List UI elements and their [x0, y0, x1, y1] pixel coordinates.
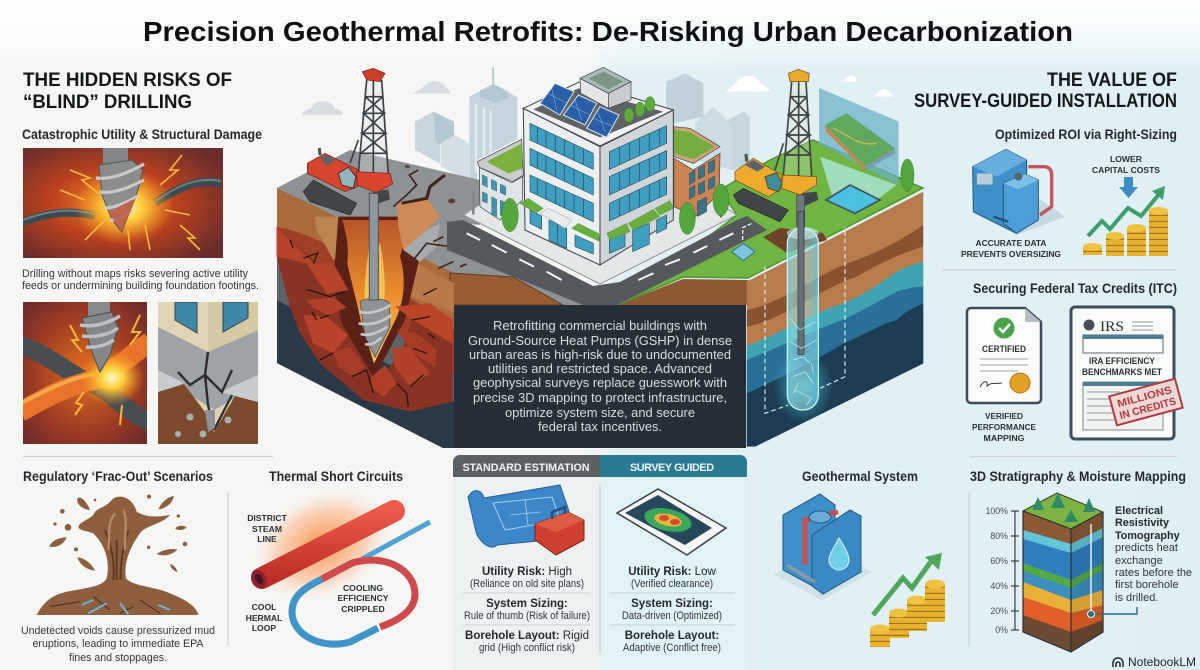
chart: stratigraphy block [1023, 493, 1137, 660]
callout: electrical resistivity tomography: first borehole [1115, 579, 1179, 591]
holographic survey screen and tablet [819, 88, 898, 213]
city block buildings [463, 67, 737, 284]
tree at right [901, 159, 914, 192]
solar panels [540, 83, 619, 137]
intro text panel: geophysical surveys replace guesswork with [473, 376, 727, 390]
roof shrubs [624, 97, 655, 122]
illustration: drill striking pipes [20, 302, 150, 444]
trees on block [1032, 493, 1095, 522]
icon: certified document: CERTIFIED [982, 344, 1026, 354]
header: survey guided: SURVEY GUIDED [630, 462, 714, 474]
heading: stratigraphy: 3D Stratigraphy & Moisture Mapping [970, 469, 1186, 484]
gray cracked surface [277, 150, 583, 305]
row text: standard estimation: Borehole Layout: Rigid [465, 630, 589, 642]
heading: geothermal system: Geothermal System [802, 469, 918, 484]
row text: standard estimation: System Sizing: [486, 598, 568, 610]
right brick building [674, 127, 720, 217]
chart axis: depth percentages [986, 506, 1019, 635]
green surveyed surface [617, 140, 923, 305]
icon: survey tablet [617, 489, 726, 555]
callout: electrical resistivity tomography: Tomography [1115, 530, 1180, 542]
label: cooling efficiency crippled: CRIPPLED [341, 604, 385, 614]
subheading: catastrophic damage: Catastrophic Utility & Structural Damage [22, 127, 262, 142]
caption: frac-out: Undetected voids cause pressurized mud [21, 625, 215, 637]
label: verified performance mapping: MAPPING [984, 433, 1025, 443]
intro text panel: federal tax incentives. [538, 420, 662, 434]
skyline and clouds [302, 67, 893, 187]
callout: electrical resistivity tomography: Resistivity [1115, 517, 1169, 529]
cracked rock and fire around blind drill [277, 217, 454, 412]
city plaza [463, 127, 737, 284]
header: standard estimation: STANDARD ESTIMATION [462, 462, 590, 474]
label: district steam line: DISTRICT [247, 513, 288, 523]
label: cool hermal loop: LOOP [252, 623, 276, 633]
icon: IRS form with stamp: IRA EFFICIENCY [1089, 356, 1155, 366]
heading: frac-out: Regulatory ‘Frac-Out’ Scenarios [23, 469, 213, 484]
panel: 3D stratigraphy [970, 469, 1192, 660]
chart axis: depth percentages: 0% [995, 625, 1008, 635]
heading: hidden risks: THE HIDDEN RISKS OF [23, 70, 232, 91]
label: lower capital costs: CAPITAL COSTS [1092, 165, 1160, 175]
lamp post [472, 191, 475, 215]
callout: electrical resistivity tomography: predicts heat [1115, 542, 1178, 554]
label: cooling efficiency crippled: COOLING [343, 583, 383, 593]
illustration: steam line and cooling loop [234, 467, 430, 644]
row text: standard estimation: Utility Risk: High [482, 566, 572, 578]
header: standard estimation [453, 455, 600, 477]
subheading: federal tax credits: Securing Federal Tax Credits (ITC) [973, 281, 1177, 296]
label: verified performance mapping: PERFORMANCE [972, 422, 1036, 432]
icon: IRS form with stamp: BENCHMARKS MET [1082, 367, 1162, 377]
label: accurate data: PREVENTS OVERSIZING [961, 249, 1061, 259]
icon: down arrow [1119, 177, 1138, 198]
intro text panel: precise 3D mapping to protect infrastructure, [473, 391, 727, 405]
intro text panel: Ground-Source Heat Pumps (GSHP) in dense [468, 334, 732, 348]
panel: comparison table [453, 455, 747, 670]
road [447, 216, 767, 305]
street trees [502, 184, 729, 234]
soil strip left of centre [450, 273, 563, 305]
main commercial building [520, 67, 673, 265]
row text: survey guided: Utility Risk: Low [628, 566, 716, 578]
illustration: cracked building foundation [158, 302, 258, 444]
auger bit [359, 299, 391, 357]
blind drill rig [303, 68, 393, 300]
caption: catastrophic damage [22, 268, 259, 292]
label: cool hermal loop: COOL [252, 602, 276, 612]
caption: frac-out: fines and stoppages. [69, 652, 167, 664]
survey-guided drill rig [733, 69, 818, 230]
chart axis: depth percentages: 40% [990, 581, 1008, 591]
stamp: millions in credits [1109, 379, 1183, 425]
icon: certified document [967, 308, 1041, 403]
awnings and entrance [520, 198, 673, 242]
row text: survey guided [622, 566, 722, 654]
divider lines [23, 270, 1177, 646]
row text: standard estimation [464, 566, 590, 654]
survey marker on road [732, 223, 755, 261]
label: district steam line: STEAM [252, 524, 282, 534]
chart: rising arrow and coin stacks [1083, 186, 1168, 256]
rooftop unit [580, 67, 631, 108]
chart axis: depth percentages: 20% [990, 606, 1008, 616]
soil strip right of centre [617, 279, 748, 305]
row text: survey guided: System Sizing: [631, 598, 713, 610]
intro text panel [454, 305, 746, 448]
row text: survey guided: Adaptive (Conflict free) [623, 642, 721, 654]
intro text panel: urban areas is high-risk due to undocumented [469, 348, 731, 362]
left earth face [276, 180, 456, 450]
intro text panel: optimize system size, and secure [505, 406, 695, 420]
callout: electrical resistivity tomography: exchange [1115, 555, 1163, 567]
label: district steam line: LINE [257, 534, 277, 544]
panel: geothermal system [773, 469, 945, 647]
icon: heat pump unit [973, 149, 1065, 235]
table body right [600, 476, 747, 670]
row text: survey guided: Borehole Layout: [625, 630, 719, 642]
panel: frac-out scenarios [21, 469, 215, 664]
label: lower capital costs [1092, 154, 1160, 175]
chart axis: depth percentages: 80% [990, 531, 1008, 541]
callout: electrical resistivity tomography: is drilled. [1115, 592, 1158, 604]
label: cooling efficiency crippled [337, 583, 389, 614]
icon: IRS form with stamp: IRS [1100, 319, 1124, 335]
stamp: millions in credits: IN CREDITS [1118, 395, 1177, 422]
panel: thermal short circuits [234, 467, 430, 644]
intro text panel: Retrofitting commercial buildings with [493, 319, 707, 333]
chart axis: depth percentages: 100% [986, 506, 1008, 516]
illustration: drill severing utility cables [23, 148, 223, 258]
caption: frac-out [21, 625, 215, 664]
row text: standard estimation: grid (High conflict risk) [479, 642, 575, 654]
caption: frac-out: eruptions, leading to immediate EPA [32, 638, 204, 650]
right earth face [740, 190, 927, 453]
label: cooling efficiency crippled: EFFICIENCY [337, 593, 389, 603]
row text: survey guided: Data-driven (Optimized) [622, 610, 722, 622]
label: cool hermal loop [246, 602, 282, 633]
heading: thermal short circuits: Thermal Short Circuits [269, 469, 403, 484]
callout: electrical resistivity tomography: rates before the [1115, 567, 1192, 579]
leader line [1088, 524, 1137, 618]
callout: electrical resistivity tomography: Electrical [1115, 505, 1163, 517]
chart: growth arrow with coins [870, 553, 945, 647]
left low building [477, 139, 523, 220]
row text: standard estimation: Rule of thumb (Risk of failure) [464, 610, 590, 622]
illustration: mud eruption [37, 495, 198, 615]
intro text panel: utilities and restricted space. Advanced [488, 362, 712, 376]
label: accurate data: ACCURATE DATA [976, 238, 1046, 248]
heading: value of survey [914, 70, 1177, 112]
callout: electrical resistivity tomography [1115, 505, 1192, 604]
label: verified performance mapping [972, 411, 1036, 443]
stamp: millions in credits: MILLIONS [1116, 384, 1173, 410]
heading: hidden risks: “BLIND” DRILLING [23, 92, 192, 113]
label: cool hermal loop: HERMAL [246, 613, 282, 623]
logo: NotebookLM: NotebookLM [1128, 655, 1196, 669]
row text: standard estimation: (Reliance on old site plans) [470, 578, 584, 590]
panel: central isometric cutaway scene [276, 67, 927, 453]
facade windows [530, 123, 667, 254]
label: district steam line [247, 513, 288, 544]
heading: value of survey: THE VALUE OF [1047, 70, 1177, 91]
panel: hidden risks of blind drilling [20, 70, 262, 444]
title: Precision Geothermal Retrofits: De-Risking Urban Decarbonization [143, 16, 1073, 47]
table body left [453, 476, 600, 670]
label: accurate data [961, 238, 1061, 259]
row text: survey guided: (Verified clearance) [631, 578, 713, 590]
caption: catastrophic damage: feeds or undermining building foundation footings. [22, 280, 259, 292]
excavated pit [763, 228, 827, 253]
caption: catastrophic damage: Drilling without maps risks severing active utility [22, 268, 248, 280]
label: verified performance mapping: VERIFIED [985, 411, 1023, 421]
subheading: optimized ROI: Optimized ROI via Right-Sizing [995, 127, 1177, 142]
icon: blueprint and toolbox [468, 485, 584, 555]
chart axis: depth percentages: 60% [990, 556, 1008, 566]
glass borehole with ground loop [765, 212, 845, 423]
heading: hidden risks [23, 70, 232, 113]
icon: geothermal unit with water drop [773, 494, 872, 600]
icon: IRS form with stamp [1071, 307, 1183, 439]
surface fissures and fire lip [393, 165, 467, 268]
panel: value of survey-guided installation [914, 70, 1183, 443]
label: lower capital costs: LOWER [1110, 154, 1143, 164]
header: survey guided [600, 455, 747, 477]
